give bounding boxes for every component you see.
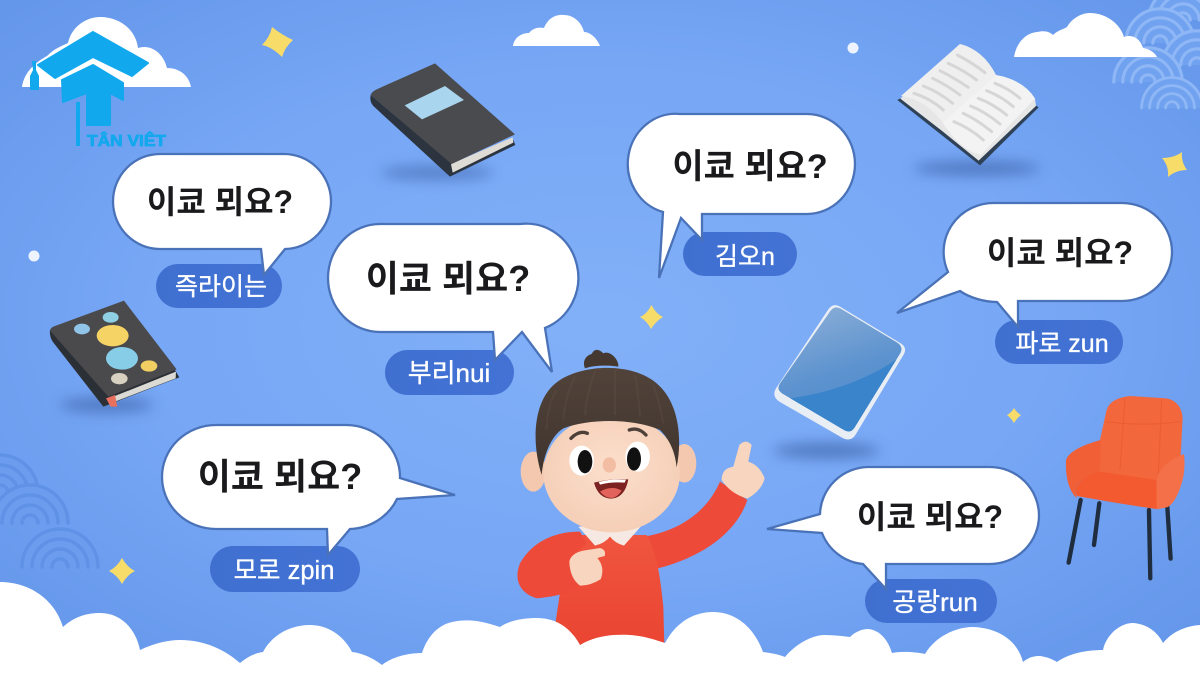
book label [405,86,464,119]
open book page block [900,44,1036,161]
bubble 5 label text: 모로 zpin [234,557,334,585]
bubble 5 [162,425,455,592]
bubble 5 shape [162,425,455,555]
wave pattern: top right [1114,0,1200,108]
chair seat [1075,472,1158,509]
open book right page [943,75,1035,155]
logo stem [76,102,80,146]
bubble 4 question: 이쿄 뫼요? [987,235,1133,271]
chair legs [1069,500,1171,578]
book cover [371,63,515,164]
character collar [578,526,642,546]
book pages [451,137,513,173]
bubble 3 label pill [683,232,797,276]
character hair stripes [547,370,663,430]
character face [543,414,680,532]
character hair bun [584,350,618,368]
bubble 3 shape [628,114,855,278]
bubble 3 [628,114,855,278]
sparkle: top [262,27,293,57]
character mouth [594,479,628,499]
bubble 6 [767,467,1039,623]
tablet screen [778,307,901,431]
character: boy [517,350,765,670]
cloud: top centre [513,15,600,46]
bubble 3 label text: 김오n [715,243,775,271]
character eyebrow left [571,432,587,438]
bubble 6 label pill [865,579,997,623]
dot: left [28,250,40,262]
chair [1066,396,1185,578]
book shadow [380,165,493,180]
sparkle: centre [640,305,663,329]
coloured book pages [113,372,176,402]
bubble 4 shape [897,203,1172,327]
chair left arm [1066,440,1101,498]
wave pattern: bottom left [0,455,98,567]
character hand right [722,442,765,499]
bubble 1 label text: 즉라이는 [175,273,267,301]
coloured book bookmark [106,395,117,407]
logo arrow [62,65,123,125]
bubble 5 label pill [210,546,360,592]
bubble 4 [897,203,1172,364]
tablet gloss [790,360,896,432]
coloured book shadow [60,398,153,412]
bubble 2 label text: 부리nui [408,358,490,388]
bubble 2 [328,224,578,395]
bubble 6 question: 이쿄 뫼요? [857,499,1003,535]
sparkle: right [1162,152,1187,177]
tablet [773,305,905,459]
character right arm [643,482,747,568]
chair back seams [1106,398,1181,477]
logo tassel [30,61,39,90]
sparkle: small right [1007,408,1021,423]
book spine and back cover [370,95,515,177]
cloud: top right [1014,13,1157,57]
bubble 4 label text: 파로 zun [1015,330,1109,358]
bubble 1 shape [113,154,331,275]
bubble 6 shape [767,467,1039,589]
book: open [897,44,1040,176]
character ear left [521,452,546,492]
bubble 3 question: 이쿄 뫼요? [672,148,828,186]
character ear right [672,444,696,483]
bubble 5 question: 이쿄 뫼요? [198,456,362,497]
tablet body [774,305,905,439]
bubble 4 label pill [995,320,1123,364]
character eye right [625,442,650,472]
bubble 6 label text: 공랑run [892,587,978,617]
open book shadow [913,161,1040,176]
open book left page [901,44,996,123]
bubble 2 shape [328,224,578,372]
tablet shadow [773,443,880,459]
character nose [603,457,616,473]
book: dark with label [370,63,515,180]
bubble 1 [113,154,331,308]
character body [555,535,665,670]
character eyebrow right [629,429,646,435]
logo cap [38,32,148,78]
character left arm [517,532,587,598]
chair right arm [1157,454,1185,509]
coloured book spine [50,330,179,407]
bubble 2 label pill [385,350,514,395]
logo: Tân Việt [22,17,191,150]
bubble 2 question: 이쿄 뫼요? [366,258,530,299]
dot: top [848,42,858,54]
coloured book dots [74,312,157,384]
open book text lines [914,55,1020,140]
bubble 1 question: 이쿄 뫼요? [147,184,293,220]
logo cloud [22,17,191,87]
character hair [536,368,679,475]
book: coloured dots [50,301,179,412]
logo text: TÂN VIÊT [87,131,166,150]
coloured book cover [50,301,177,397]
chair back [1100,396,1183,482]
open book back cover [897,67,1039,165]
bottom clouds [0,582,1200,675]
sparkle: bottom left [109,558,135,584]
character hand left [569,548,605,586]
bubble 1 label pill [156,264,282,308]
character eye left [569,446,594,476]
